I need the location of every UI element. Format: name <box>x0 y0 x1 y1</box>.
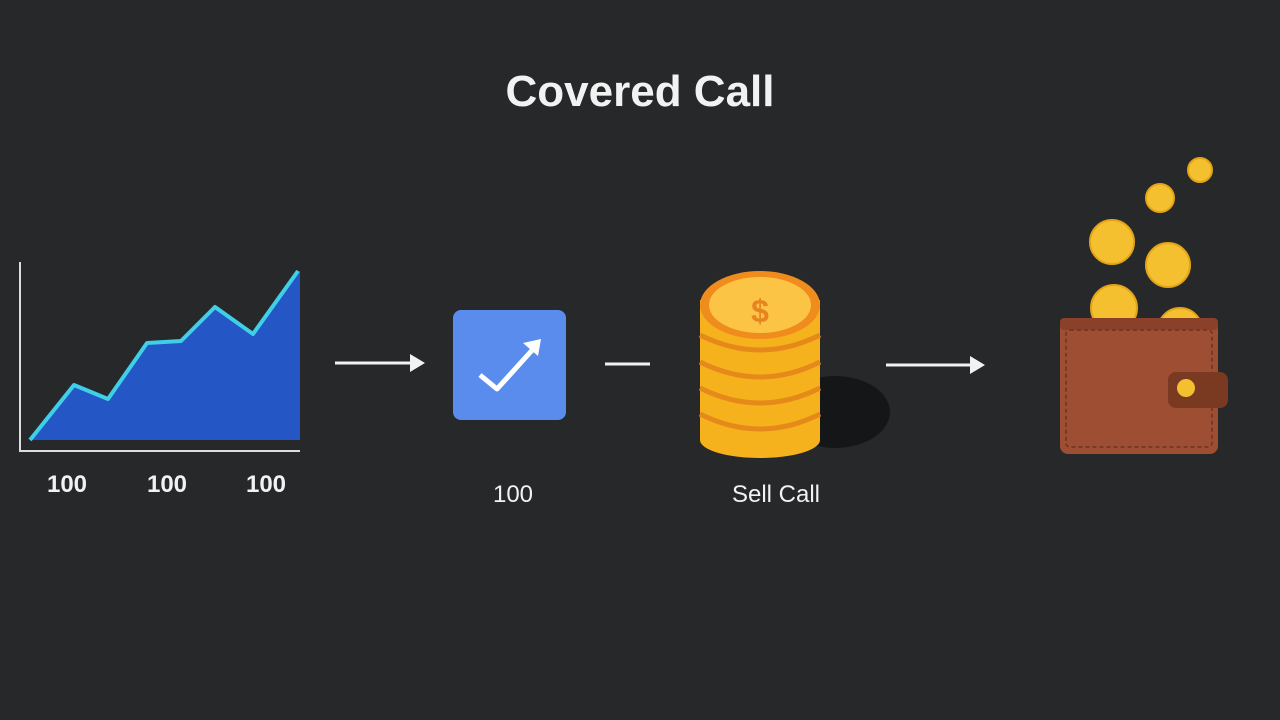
icon: coin stack: $ <box>751 293 769 329</box>
icon: coin stack <box>700 271 890 458</box>
icon: wallet with coins <box>1060 158 1228 454</box>
arrow 2 <box>886 356 985 374</box>
chart labels <box>47 471 286 498</box>
icon: blue trend box <box>453 310 566 420</box>
chart labels: 100 <box>147 471 187 498</box>
title: Covered Call <box>506 67 774 116</box>
arrow 1 <box>335 354 425 372</box>
chart labels: 100 <box>47 471 87 498</box>
chart: area chart <box>20 262 300 498</box>
label sell call: Sell Call <box>732 481 820 508</box>
chart labels: 100 <box>246 471 286 498</box>
dash connector <box>605 362 650 366</box>
label 100: 100 <box>493 481 533 508</box>
